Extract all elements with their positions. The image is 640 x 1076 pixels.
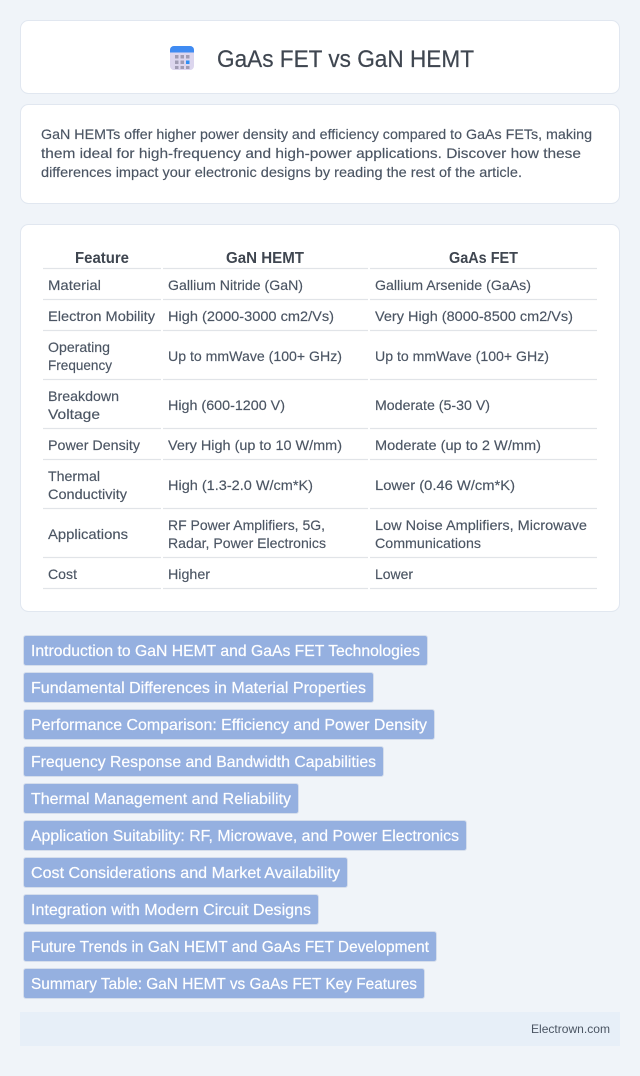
row: power density: Moderate (up to 2 W/mm)	[375, 437, 541, 453]
row: cost	[48, 566, 413, 582]
table header: GaAs FET	[449, 250, 518, 267]
link: integration: Integration with Modern Circuit Designs	[31, 902, 311, 919]
link: introduction	[24, 636, 428, 666]
footer: Electrown.com	[531, 1022, 610, 1036]
link: cost considerations: Cost Considerations and Market Availability	[31, 865, 340, 882]
footer	[20, 1012, 620, 1046]
link: performance comparison	[24, 710, 434, 740]
title: GaAs FET vs GaN HEMT	[217, 46, 474, 73]
row: applications	[48, 517, 587, 551]
row: breakdown voltage: Moderate (5-30 V)	[375, 397, 490, 413]
panel: title header	[20, 20, 620, 94]
link: summary table	[24, 968, 424, 998]
row: thermal conductivity	[48, 468, 515, 502]
table header	[75, 250, 518, 267]
link: cost considerations	[24, 858, 348, 888]
link: frequency response	[24, 746, 384, 776]
row: applications: Low Noise Amplifiers, Microwave	[375, 517, 587, 533]
section links list	[24, 636, 466, 998]
link: fundamental differences	[24, 672, 374, 702]
row: electron mobility: Electron Mobility	[48, 308, 155, 324]
link: application suitability: Application Suitability: RF, Microwave, and Power Electronics	[31, 828, 459, 845]
link: performance comparison: Performance Comparison: Efficiency and Power Density	[31, 717, 427, 734]
row: breakdown voltage: Breakdown	[48, 388, 119, 404]
row: material	[48, 277, 531, 293]
row: cost: Lower	[375, 566, 413, 582]
row: material: Gallium Arsenide (GaAs)	[375, 277, 531, 293]
row: material: Gallium Nitride (GaN)	[168, 277, 303, 293]
row: thermal conductivity: Lower (0.46 W/cm*K)	[375, 477, 515, 493]
row: operating frequency: Frequency	[48, 357, 112, 373]
link: thermal management	[24, 784, 298, 814]
row: power density	[48, 437, 541, 453]
row: electron mobility: Very High (8000-8500 cm2/Vs)	[375, 308, 573, 324]
text block: introduction: them ideal for high-frequency and high-power applications. Discover how these	[41, 145, 581, 161]
row: applications: Radar, Power Electronics	[168, 535, 326, 551]
row: breakdown voltage	[48, 388, 490, 422]
row: operating frequency	[48, 339, 549, 373]
link: introduction: Introduction to GaN HEMT and GaAs FET Technologies	[31, 643, 420, 660]
table header: GaN HEMT	[226, 250, 304, 267]
text block: introduction: differences impact your electronic designs by reading the rest of the article.	[41, 164, 522, 180]
link: integration	[24, 894, 318, 924]
link: application suitability	[24, 820, 466, 850]
row: electron mobility	[48, 308, 573, 324]
link: frequency response: Frequency Response and Bandwidth Capabilities	[31, 754, 376, 771]
link: summary table: Summary Table: GaN HEMT vs GaAs FET Key Features	[31, 976, 417, 993]
row: breakdown voltage: Voltage	[48, 406, 100, 422]
row: applications: Applications	[48, 526, 128, 542]
row: thermal conductivity: High (1.3-2.0 W/cm*K)	[168, 477, 313, 493]
icon: calendar app	[170, 46, 194, 70]
row: electron mobility: High (2000-3000 cm2/Vs)	[168, 308, 334, 324]
row: cost: Higher	[168, 566, 210, 582]
row: cost: Cost	[48, 566, 77, 582]
link: thermal management: Thermal Management and Reliability	[31, 791, 291, 808]
row: power density: Very High (up to 10 W/mm)	[168, 437, 342, 453]
row: applications: RF Power Amplifiers, 5G,	[168, 517, 325, 533]
row: thermal conductivity: Conductivity	[48, 486, 127, 502]
row: operating frequency: Up to mmWave (100+ GHz)	[168, 348, 342, 364]
row: breakdown voltage: High (600-1200 V)	[168, 397, 285, 413]
link: future trends: Future Trends in GaN HEMT and GaAs FET Development	[31, 939, 430, 956]
row: applications: Communications	[375, 535, 481, 551]
row: power density: Power Density	[48, 437, 140, 453]
row: operating frequency: Operating	[48, 339, 110, 355]
text block: introduction: GaN HEMTs offer higher power density and efficiency compared to GaAs FETs, making	[41, 126, 592, 142]
panel: comparison table	[20, 224, 620, 612]
table header: Feature	[75, 250, 129, 267]
link: fundamental differences: Fundamental Differences in Material Properties	[31, 680, 366, 697]
row: operating frequency: Up to mmWave (100+ GHz)	[375, 348, 549, 364]
row: thermal conductivity: Thermal	[48, 468, 100, 484]
text block: introduction	[41, 126, 592, 180]
link: future trends	[24, 932, 436, 962]
row: material: Material	[48, 277, 101, 293]
panel: introduction	[20, 104, 620, 204]
